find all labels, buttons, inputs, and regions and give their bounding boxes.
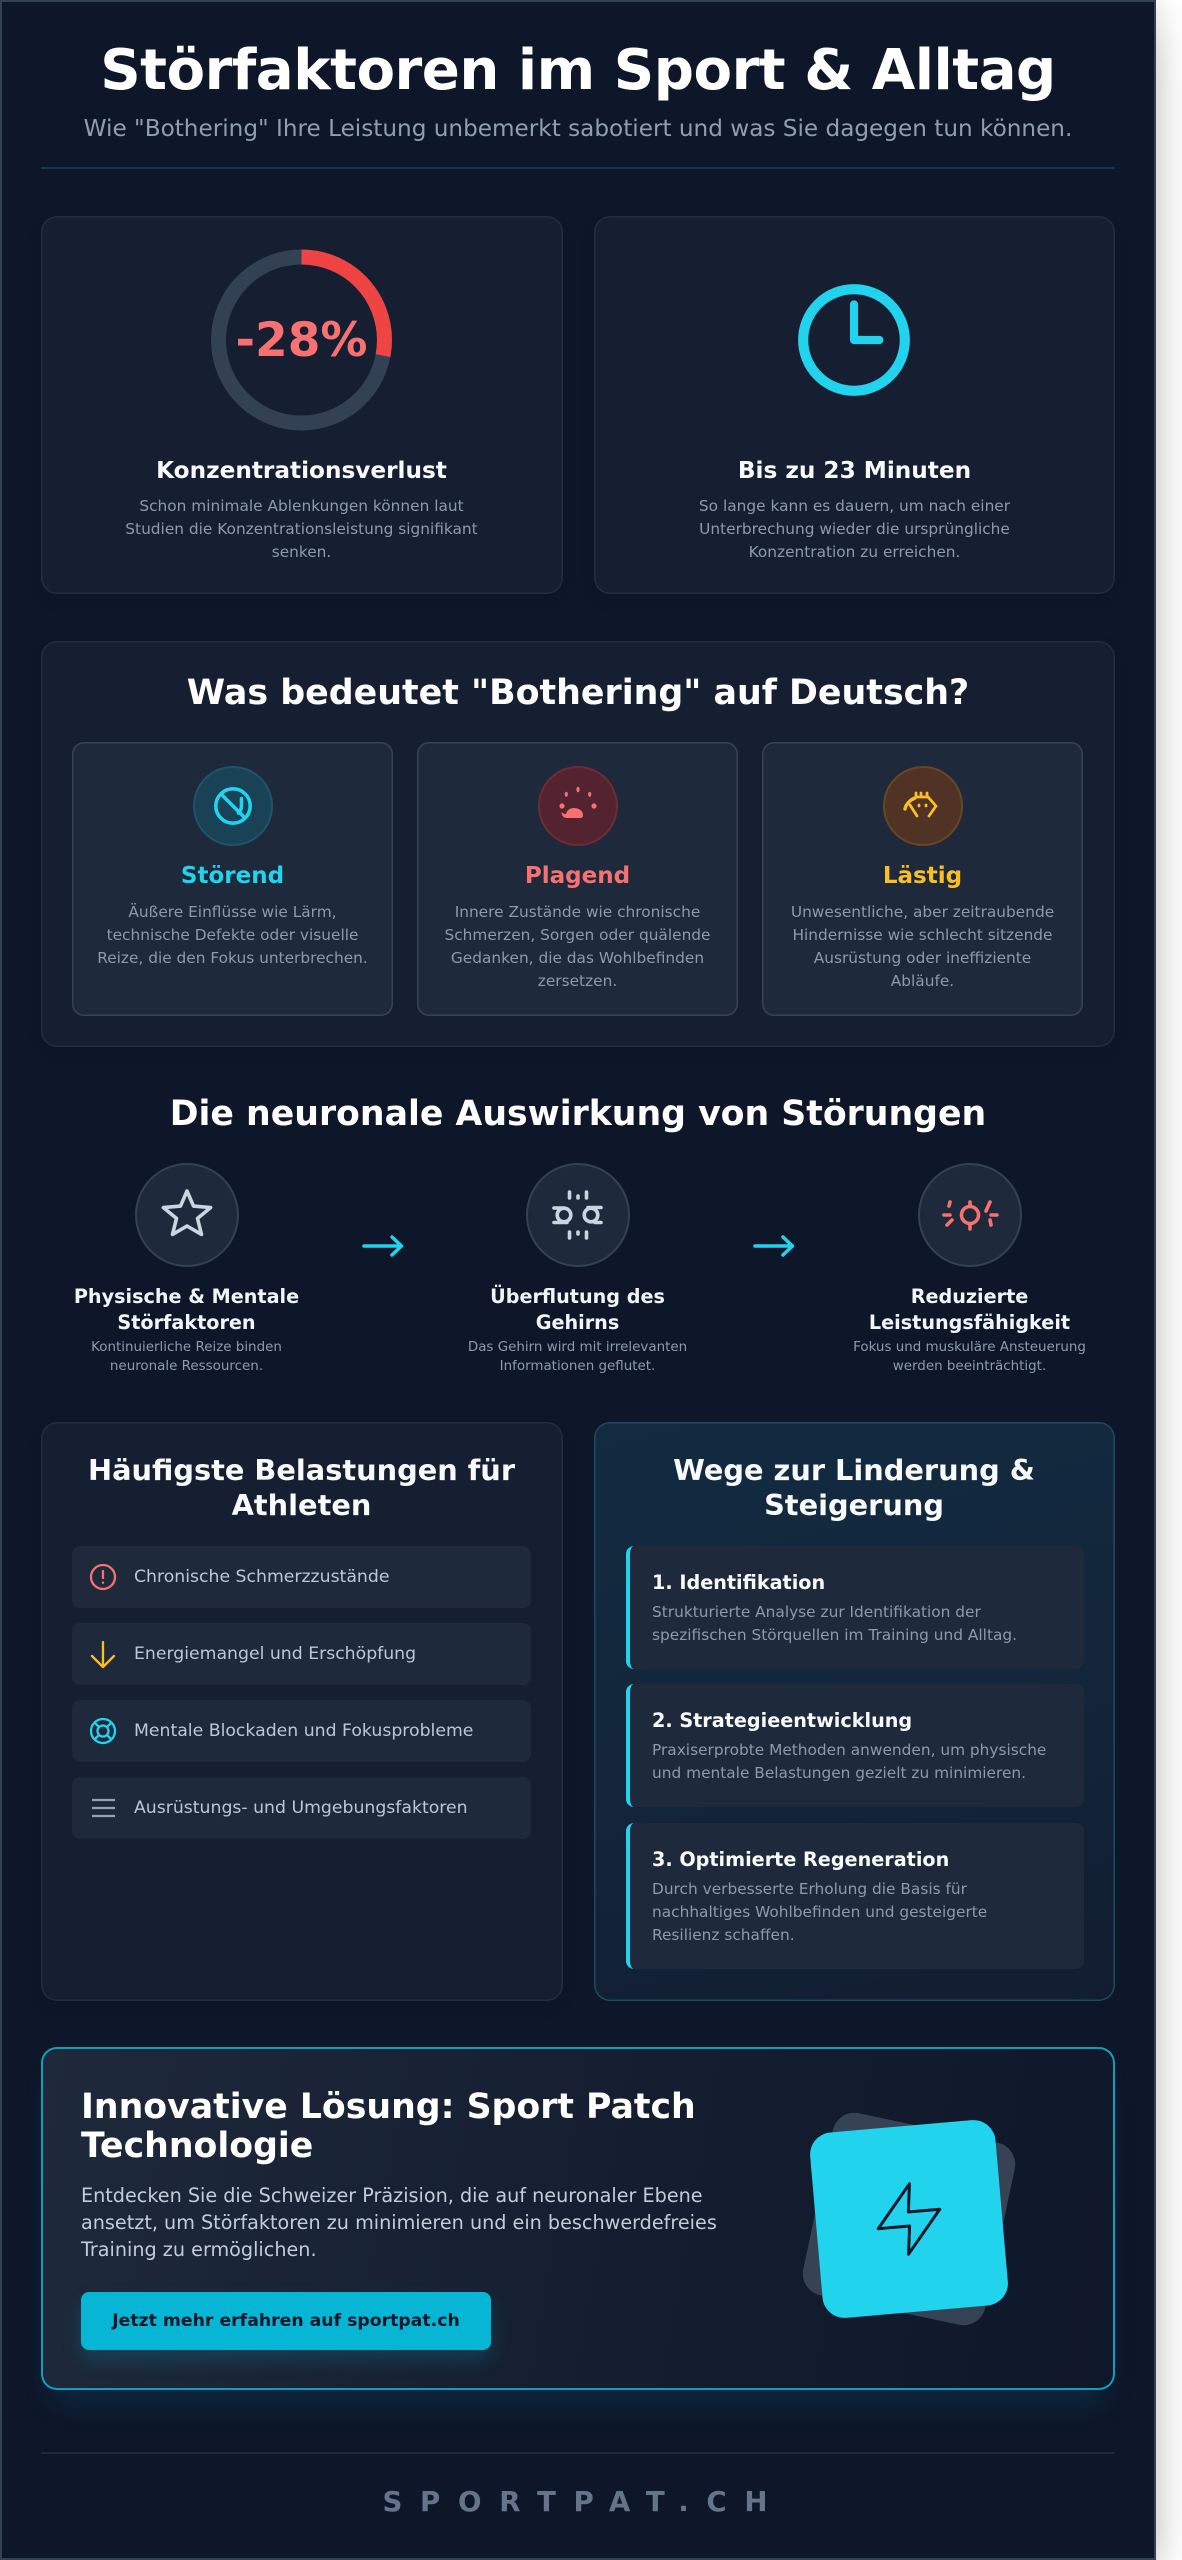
step text: Kontinuierliche Reize binden <box>91 1340 282 1355</box>
icon: pain <box>538 766 618 846</box>
description <box>97 902 368 966</box>
step 1 <box>626 1546 1084 1669</box>
step title: Reduzierte <box>911 1285 1028 1308</box>
step text: Fokus und muskuläre Ansteuerung <box>853 1340 1086 1355</box>
step text: neuronale Ressourcen. <box>110 1359 263 1374</box>
list item: pain <box>72 1546 531 1608</box>
card text: Unterbrechung wieder die ursprüngliche <box>699 520 1010 538</box>
heading: Technologie <box>81 2126 313 2166</box>
card text <box>699 496 1010 560</box>
card text: Konzentration zu erreichen. <box>749 542 960 560</box>
card text: So lange kann es dauern, um nach einer <box>699 496 1010 514</box>
step title <box>869 1285 1070 1334</box>
heading: Was bedeutet "Bothering" auf Deutsch? <box>187 673 969 713</box>
step title: Physische & Mentale <box>74 1285 299 1308</box>
label: Ausrüstungs- und Umgebungsfaktoren <box>134 1798 468 1818</box>
description: ansetzt, um Störfaktoren zu minimieren und ein beschwerdefreies <box>81 2211 717 2234</box>
step title: 2. Strategieentwicklung <box>652 1709 912 1732</box>
icon: star <box>134 1163 238 1267</box>
card: Störend <box>72 742 393 1016</box>
heading: neuronal effect: Die neuronale Auswirkung von Störungen <box>170 1094 986 1134</box>
panel: Wege zur Linderung <box>594 1422 1115 2001</box>
description: Unwesentliche, aber zeitraubende <box>791 902 1054 920</box>
icon: reduced performance <box>918 1163 1022 1267</box>
description: Training zu ermöglichen. <box>81 2238 317 2261</box>
step text <box>652 1603 1017 1644</box>
icon: arrow down <box>90 1640 116 1668</box>
step title <box>490 1284 665 1334</box>
label: Chronische Schmerzzustände <box>134 1567 389 1587</box>
heading: Steigerung <box>764 1488 944 1522</box>
label: Mentale Blockaden und Fokusprobleme <box>134 1721 473 1741</box>
flow step 3 <box>853 1163 1086 1374</box>
step title: 3. Optimierte Regeneration <box>652 1848 949 1871</box>
step text: Das Gehirn wird mit irrelevanten <box>468 1340 687 1355</box>
button <box>81 2292 491 2350</box>
description <box>444 902 710 990</box>
list item: energy <box>72 1623 531 1685</box>
description: Schmerzen, Sorgen oder quälende <box>444 926 710 944</box>
step text: Resilienz schaffen. <box>652 1926 795 1944</box>
arrow 2 <box>753 1235 794 1257</box>
icon: overload <box>526 1163 630 1267</box>
panel: Konzentrationsverlust <box>41 216 562 594</box>
list item: equipment <box>72 1777 531 1839</box>
step title: Überflutung des <box>490 1285 665 1308</box>
description: Reize, die den Fokus unterbrechen. <box>97 948 368 966</box>
step title: 1. Identifikation <box>652 1571 825 1594</box>
step 3 <box>626 1823 1084 1969</box>
subtitle: Wie "Bothering" Ihre Leistung unbemerkt sabotiert und was Sie dagegen tun können. <box>84 116 1072 142</box>
step text: werden beeinträchtigt. <box>893 1359 1046 1374</box>
step 2 <box>626 1684 1084 1807</box>
step text <box>853 1340 1086 1374</box>
description: zersetzen. <box>538 972 617 990</box>
step text <box>652 1880 987 1944</box>
card: Lästig <box>762 742 1083 1016</box>
panel: Was bedeutet Bothering <box>41 641 1115 1047</box>
description: Hindernisse wie schlecht sitzende <box>792 926 1052 944</box>
panel: Bis zu 23 Minuten <box>594 216 1115 594</box>
heading: Athleten <box>232 1488 371 1522</box>
description: Gedanken, die das Wohlbefinden <box>451 948 704 966</box>
heading: Wege zur Linderung & <box>673 1453 1035 1487</box>
arrow 1 <box>362 1235 404 1257</box>
description: Entdecken Sie die Schweizer Präzision, die auf neuronaler Ebene <box>81 2184 703 2207</box>
back card <box>799 2109 1019 2329</box>
heading: Häufigste Belastungen für <box>88 1453 515 1487</box>
label: Lästig <box>883 863 962 889</box>
card text <box>125 496 478 560</box>
description: Äußere Einflüsse wie Lärm, <box>128 902 337 920</box>
description <box>80 2184 717 2261</box>
step title: Störfaktoren <box>117 1311 256 1334</box>
step text: Informationen geflutet. <box>500 1359 655 1374</box>
card: Plagend <box>417 742 738 1016</box>
heading <box>81 2087 696 2166</box>
description: Innere Zustände wie chronische <box>455 902 700 920</box>
panel: Häufigste Belastungen <box>41 1422 562 2001</box>
icon: clock <box>798 284 910 396</box>
heading <box>673 1453 1035 1522</box>
description <box>791 902 1054 990</box>
step title: Gehirns <box>536 1311 619 1334</box>
icon: lifebuoy <box>90 1718 116 1744</box>
front card <box>808 2118 1010 2320</box>
panel: CTA sport patch <box>41 2047 1115 2390</box>
card text: senken. <box>272 542 331 560</box>
step text <box>468 1340 687 1374</box>
description: technische Defekte oder visuelle <box>107 926 358 944</box>
icon: alert <box>90 1564 116 1590</box>
description: Abläufe. <box>891 972 954 990</box>
step title <box>74 1285 299 1334</box>
label: Plagend <box>525 863 630 889</box>
patch graphic <box>802 2112 1016 2326</box>
button: Jetzt mehr erfahren auf sportpat.ch <box>112 2311 460 2331</box>
card text: Studien die Konzentrationsleistung signifikant <box>125 520 478 538</box>
step title: Leistungsfähigkeit <box>869 1311 1070 1334</box>
list item: mental <box>72 1700 531 1762</box>
step text: spezifischen Störquellen im Training und Alltag. <box>652 1626 1017 1644</box>
step text <box>91 1340 282 1374</box>
icon: menu <box>92 1798 115 1818</box>
icon: bolt <box>876 2182 942 2256</box>
step text: Praxiserprobte Methoden anwenden, um physische <box>652 1741 1046 1759</box>
card title: Bis zu 23 Minuten <box>738 456 971 484</box>
description: Ausrüstung oder ineffiziente <box>814 948 1031 966</box>
stat value: -28% <box>235 313 368 368</box>
label: Störend <box>181 863 284 889</box>
progress ring <box>211 250 392 430</box>
step text: Strukturierte Analyse zur Identifikation der <box>652 1603 981 1621</box>
title: Störfaktoren im Sport & Alltag <box>100 38 1056 103</box>
flow step 2 <box>468 1163 687 1374</box>
step text: Durch verbesserte Erholung die Basis für <box>652 1880 967 1898</box>
flow step 1 <box>74 1163 299 1374</box>
step text: und mentale Belastungen gezielt zu minimieren. <box>652 1764 1026 1782</box>
icon: disturbance <box>193 766 273 846</box>
icon: nuisance <box>883 766 963 846</box>
step text: nachhaltiges Wohlbefinden und gesteigerte <box>652 1903 987 1921</box>
card text: Schon minimale Ablenkungen können laut <box>139 496 464 514</box>
card title: Konzentrationsverlust <box>156 456 447 484</box>
heading: Innovative Lösung: Sport Patch <box>81 2087 696 2127</box>
heading <box>88 1453 515 1522</box>
footer brand: SPORTPAT.CH <box>382 2485 785 2518</box>
step text <box>652 1741 1046 1782</box>
label: Energiemangel und Erschöpfung <box>134 1644 416 1664</box>
